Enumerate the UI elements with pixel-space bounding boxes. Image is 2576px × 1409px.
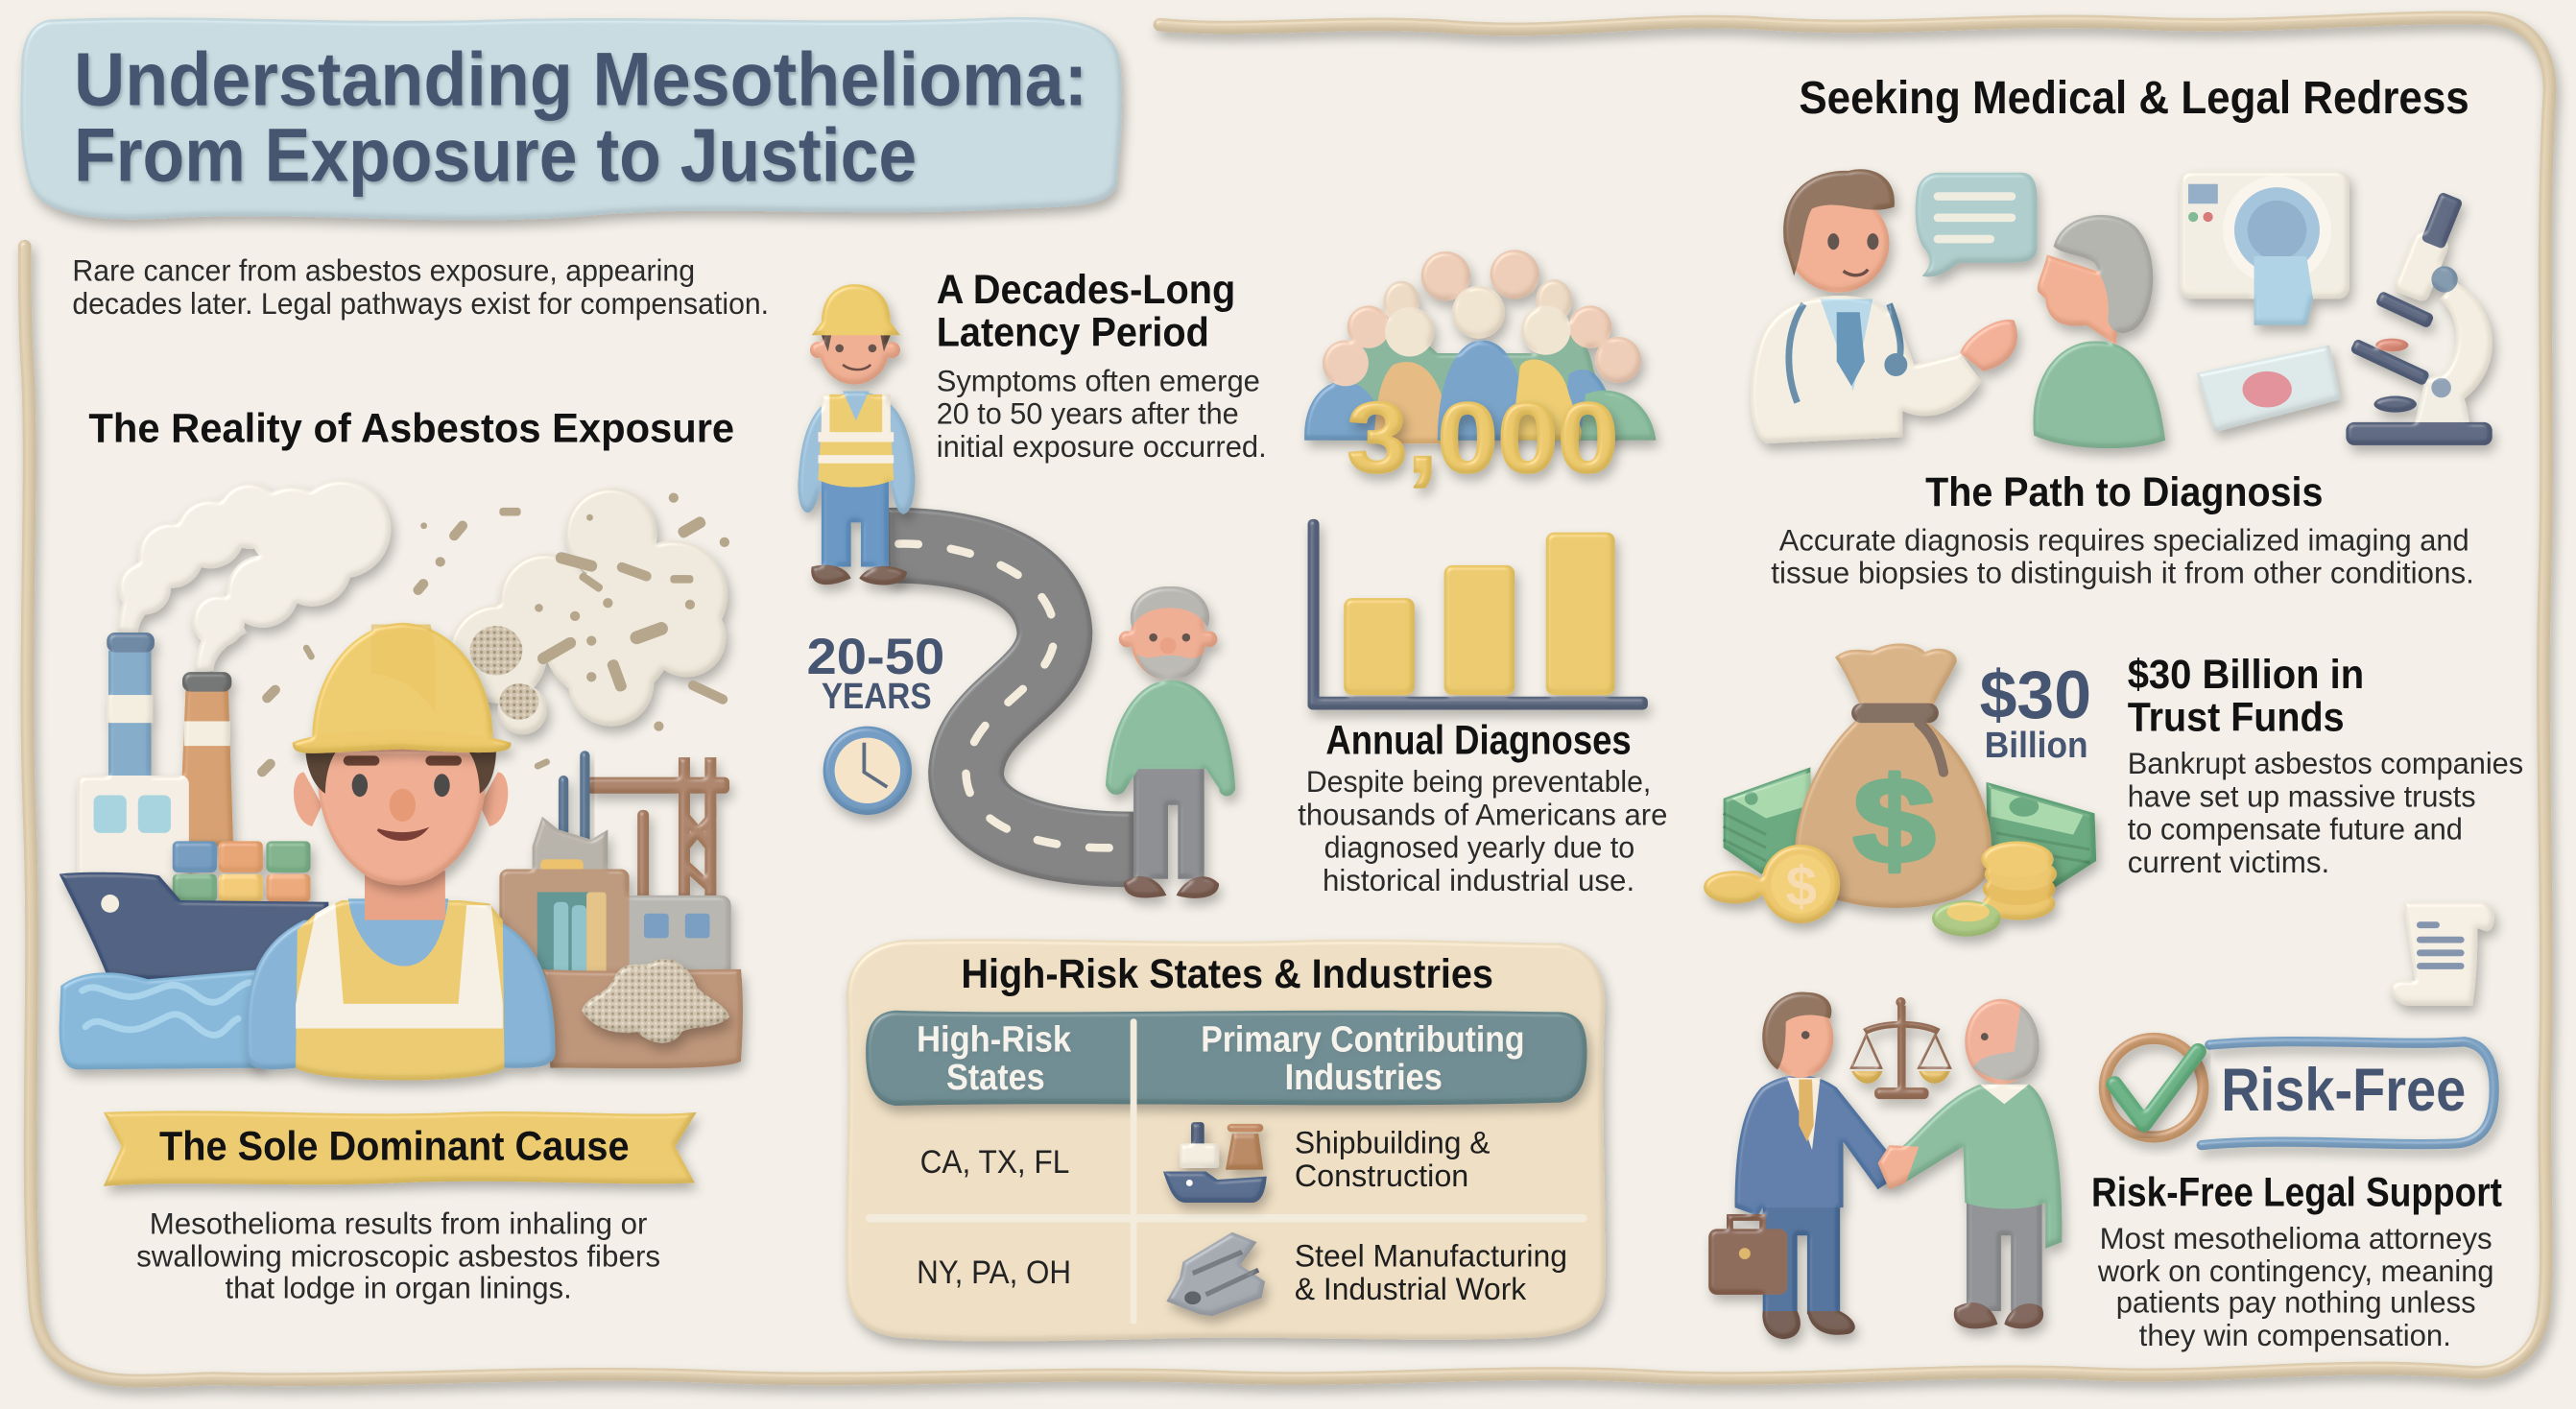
bar 1 [1344,598,1415,695]
intro text [72,253,769,321]
text: risk-free body: patients pay nothing unless [2116,1285,2476,1320]
cell: shipbuilding: Construction [1295,1158,1468,1193]
text: latency body: 20 to 50 years after the [937,396,1239,431]
heading: latency [937,267,1235,355]
text: risk-free body [2097,1221,2493,1352]
icon: MRI scanner [2180,171,2349,325]
bar chart: annual diagnoses [1308,519,1648,709]
young worker figure [798,284,915,585]
icon: speech bubble [1916,173,2038,276]
text: path to diagnosis body: tissue biopsies to distinguish it from other conditions. [1771,556,2474,590]
icon: microscope [2346,191,2493,445]
text: annual diagnoses body: diagnosed yearly due to [1324,830,1634,865]
chimneys [77,633,233,891]
cash stack left [1724,767,1810,874]
older man figure [1106,586,1235,898]
intro text: decades later. Legal pathways exist for compensation. [72,286,769,321]
tan and grey buildings [499,817,731,977]
heading: latency: Latency Period [937,309,1209,355]
table title: High-Risk States & Industries [961,951,1493,997]
stat: $30 billion: $30 [1980,657,2091,732]
text: latency body: Symptoms often emerge [937,363,1260,397]
text: cause description [136,1206,660,1304]
badge: risk-free [2105,1039,2494,1145]
doctor figure [1751,169,2017,443]
icon: steel beams [1166,1232,1265,1316]
cell: row 2 states: NY, PA, OH [917,1254,1071,1291]
text: path to diagnosis body: Accurate diagnosis requires specialized imaging and [1779,522,2469,557]
ship hull [60,872,328,986]
icon: clock [823,727,912,815]
cell: steel [1295,1239,1567,1306]
asbestos dust cloud [255,488,729,778]
heading: trust funds [2128,652,2364,741]
intro text: Rare cancer from asbestos exposure, appearing [72,253,695,288]
title plate [20,17,1122,220]
stat: 20-50 years: YEARS [822,676,932,716]
cell: shipbuilding [1295,1126,1491,1193]
icon: legal scroll [2391,902,2494,1006]
title text: From Exposure to Justice [74,112,917,197]
text: annual diagnoses body: Despite being preventable, [1306,764,1651,799]
heading: risk-free legal support: Risk-Free Legal Support [2091,1169,2502,1215]
attorney figure [1708,992,1893,1339]
text: cause description: Mesothelioma results from inhaling or [150,1206,648,1241]
heading: latency: A Decades-Long [937,267,1235,313]
text: trust funds body: Bankrupt asbestos companies [2128,746,2523,780]
stat: $30 billion [1980,657,2091,765]
heading: path to diagnosis: The Path to Diagnosis [1925,469,2323,515]
white smoke [118,480,391,674]
icon: tissue slide [2197,345,2341,432]
text: annual diagnoses body: historical industrial use. [1323,863,1634,897]
raw asbestos rock [582,959,729,1043]
heading: seeking medical and legal redress: Seeking Medical & Legal Redress [1799,73,2469,124]
cell: steel: Steel Manufacturing [1295,1239,1567,1274]
brown base [542,969,743,1068]
text: trust funds body: have set up massive trusts [2128,778,2476,813]
stat: 3,000: 3,000 [1348,382,1618,492]
container blocks [173,841,311,902]
bar 2 [1444,565,1515,695]
sack [1795,643,1992,908]
table header: High-Risk [917,1019,1071,1060]
text: cause description: swallowing microscopic asbestos fibers [136,1239,660,1274]
poles [559,751,590,852]
table header: Primary Contributing [1201,1019,1524,1060]
text: latency body [937,363,1267,464]
heading: annual diagnoses: Annual Diagnoses [1325,718,1632,764]
heading: reality of asbestos exposure: The Reality of Asbestos Exposure [88,405,734,451]
panel: high-risk states and industries [846,939,1606,1341]
text: trust funds body: current victims. [2128,845,2329,879]
worker head [294,750,508,920]
icon: scales of justice [1851,997,1950,1099]
badge: risk-free: Risk-Free [2221,1057,2466,1124]
text: risk-free body: work on contingency, meaning [2097,1254,2493,1288]
stat: 20-50 years: 20-50 [806,629,944,685]
text: cause description: that lodge in organ linings. [226,1270,572,1304]
cell: row 1 states: CA, TX, FL [920,1144,1069,1181]
text: trust funds body [2128,746,2523,879]
winding road [887,544,1133,849]
text: trust funds body: to compensate future and [2128,812,2463,847]
banner: sole dominant cause [104,1110,697,1186]
cell: steel: & Industrial Work [1295,1272,1527,1306]
coins [1704,841,2057,937]
heading: trust funds: $30 Billion in [2128,652,2364,698]
stat: $30 billion: Billion [1985,725,2088,765]
text: risk-free body: Most mesothelioma attorneys [2100,1221,2493,1255]
water [60,969,263,1069]
text: annual diagnoses body [1298,764,1667,897]
worker body [246,898,556,1080]
crowd icon [1304,250,1656,443]
patient figure [2033,215,2165,448]
client figure [1878,999,2062,1328]
bar 3 [1546,533,1615,695]
banner: sole dominant cause: The Sole Dominant Cause [159,1123,630,1169]
title text [74,37,1087,197]
table header: Industries [1285,1057,1443,1097]
coins: $ [1786,855,1817,918]
stat: 20-50 years [806,629,944,716]
crane [586,757,729,900]
text: risk-free body: they win compensation. [2139,1318,2451,1352]
icon: money bag and cash [1704,643,2096,937]
illustration: industrial worker scene [60,480,743,1080]
heading: trust funds: Trust Funds [2128,695,2345,741]
text: latency body: initial exposure occurred. [937,429,1267,464]
text: annual diagnoses body: thousands of Americans are [1298,797,1667,831]
table header: States [946,1057,1045,1097]
text: path to diagnosis body [1771,522,2474,590]
table header [866,1011,1587,1106]
title text: Understanding Mesothelioma: [74,37,1087,122]
cell: shipbuilding: Shipbuilding & [1295,1126,1491,1160]
sack: $ [1853,752,1935,889]
icon: ship and derrick [1163,1122,1267,1203]
cash stack right [1986,782,2096,887]
hard hat [293,623,511,753]
